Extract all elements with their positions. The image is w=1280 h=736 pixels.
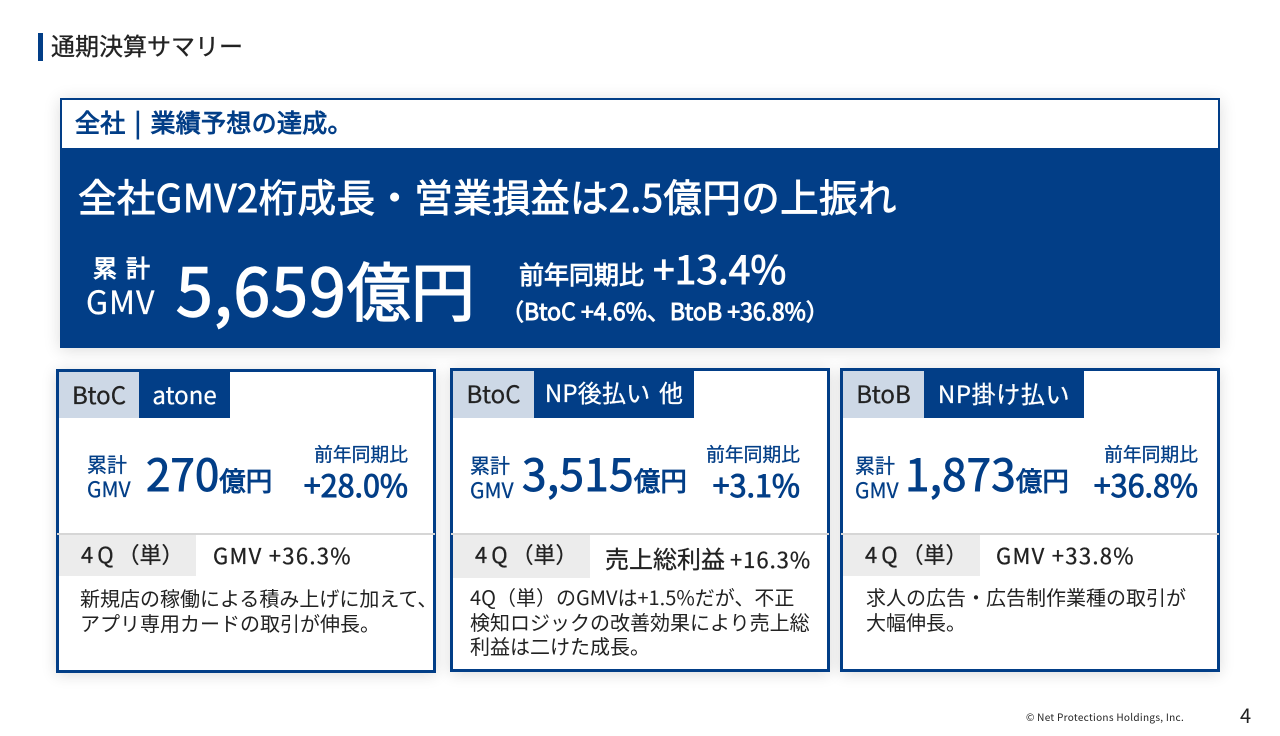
- year-on-year: 前年同期比: [519, 256, 644, 292]
- page number: 4: [1240, 700, 1251, 729]
- tag: BtoC: BtoC: [72, 376, 126, 411]
- cumulative label: [87, 449, 131, 504]
- tag: NP: [534, 371, 694, 418]
- 4Q metric: GMV +33.8%: [996, 539, 1135, 571]
- divider: [451, 533, 829, 535]
- year-on-year: +13.4%: [653, 240, 786, 296]
- year-on-year: 前年同期比: [314, 440, 408, 467]
- cumulative label: GMV: [855, 475, 899, 505]
- tag: BtoC: [453, 371, 534, 418]
- year-on-year: 前年同期比: [1104, 440, 1198, 467]
- description: [866, 582, 1186, 636]
- tag: 4Q: 4Q（単）: [475, 538, 578, 570]
- panel: company summary: [60, 98, 1220, 348]
- tag: 4Q: [453, 535, 590, 578]
- 4Q metric: 売上総利益 +16.3%: [605, 540, 811, 575]
- cumulative label: 累計: [855, 450, 895, 479]
- description: [80, 583, 437, 637]
- value: 270億円: [146, 440, 272, 504]
- description: [470, 582, 810, 660]
- tag: 4Q: [59, 535, 196, 576]
- year-on-year: [304, 440, 408, 506]
- cumulative GMV label: [86, 249, 159, 324]
- cumulative label: GMV: [87, 474, 131, 504]
- cumulative label: 累計: [470, 450, 510, 479]
- divider: [841, 533, 1219, 535]
- tag: BtoC: BtoC: [466, 375, 521, 410]
- description: 新規店の稼働による積み上げに加えて、: [80, 583, 437, 612]
- cumulative label: [470, 450, 514, 505]
- panel: BtoB NP: [840, 368, 1220, 672]
- description: 利益は二けた成長。: [470, 631, 650, 660]
- tag: atone: atone: [152, 376, 217, 411]
- tag: BtoB: [843, 371, 924, 418]
- year-on-year: [1094, 440, 1198, 506]
- year-on-year: 前年同期比: [706, 440, 800, 467]
- tag: 4Q: 4Q（単）: [81, 538, 184, 570]
- headline: 全社GMV2桁成長・営業損益は2.5億円の上振れ: [78, 168, 897, 224]
- cumulative GMV label: GMV: [86, 278, 155, 324]
- tag: NP: NP後払い 他: [545, 374, 683, 409]
- panel header: [62, 100, 1218, 148]
- cumulative GMV label: 累計: [93, 249, 159, 284]
- year-on-year: [501, 240, 829, 327]
- tag: NP: NP掛け払い: [938, 375, 1070, 410]
- tag: BtoC: [59, 372, 139, 418]
- divider: [57, 533, 435, 535]
- year-on-year: +3.1%: [713, 462, 800, 506]
- year-on-year: +36.8%: [1094, 462, 1198, 506]
- year-on-year: [706, 440, 800, 506]
- cumulative label: [855, 450, 899, 505]
- panel header: 全社 | 業績予想の達成。: [75, 104, 353, 140]
- description: 検知ロジックの改善効果により売上総: [470, 606, 810, 636]
- value: 3,515億円: [522, 440, 687, 504]
- cumulative label: GMV: [470, 475, 514, 505]
- title: 通期決算サマリー: [51, 27, 243, 62]
- description: 求人の広告・広告制作業種の取引が: [866, 582, 1186, 611]
- description: 大幅伸長。: [866, 607, 966, 636]
- tag: 4Q: 4Q（単）: [865, 538, 968, 570]
- tag: NP: [924, 371, 1084, 418]
- 4Q metric: GMV +36.3%: [213, 539, 352, 571]
- copyright: © Net Protections Holdings, Inc.: [1026, 709, 1184, 724]
- description: 4Q（単）のGMVは+1.5%だが、不正: [470, 582, 794, 611]
- year-on-year: +28.0%: [304, 462, 408, 506]
- year-on-year: （BtoC +4.6%、BtoB +36.8%）: [501, 293, 829, 327]
- description: アプリ専用カードの取引が伸長。: [80, 608, 380, 637]
- panel: BtoC NP: [450, 368, 830, 672]
- tag: BtoB: BtoB: [856, 375, 911, 410]
- tag: atone: [139, 372, 230, 418]
- tag: 4Q: [843, 535, 980, 576]
- cumulative GMV value: 5,659億円: [176, 240, 475, 336]
- panel: BtoC atone: [56, 369, 436, 673]
- cumulative label: 累計: [87, 449, 127, 478]
- value: 1,873億円: [905, 440, 1069, 504]
